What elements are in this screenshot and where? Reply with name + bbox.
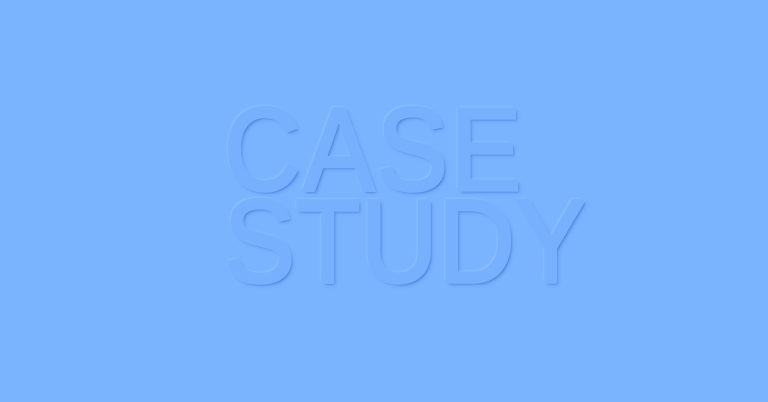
title line: STUDY: STUDY bbox=[224, 176, 587, 308]
title: CASE STUDY bbox=[224, 84, 587, 308]
title line: CASE: CASE bbox=[224, 84, 524, 216]
